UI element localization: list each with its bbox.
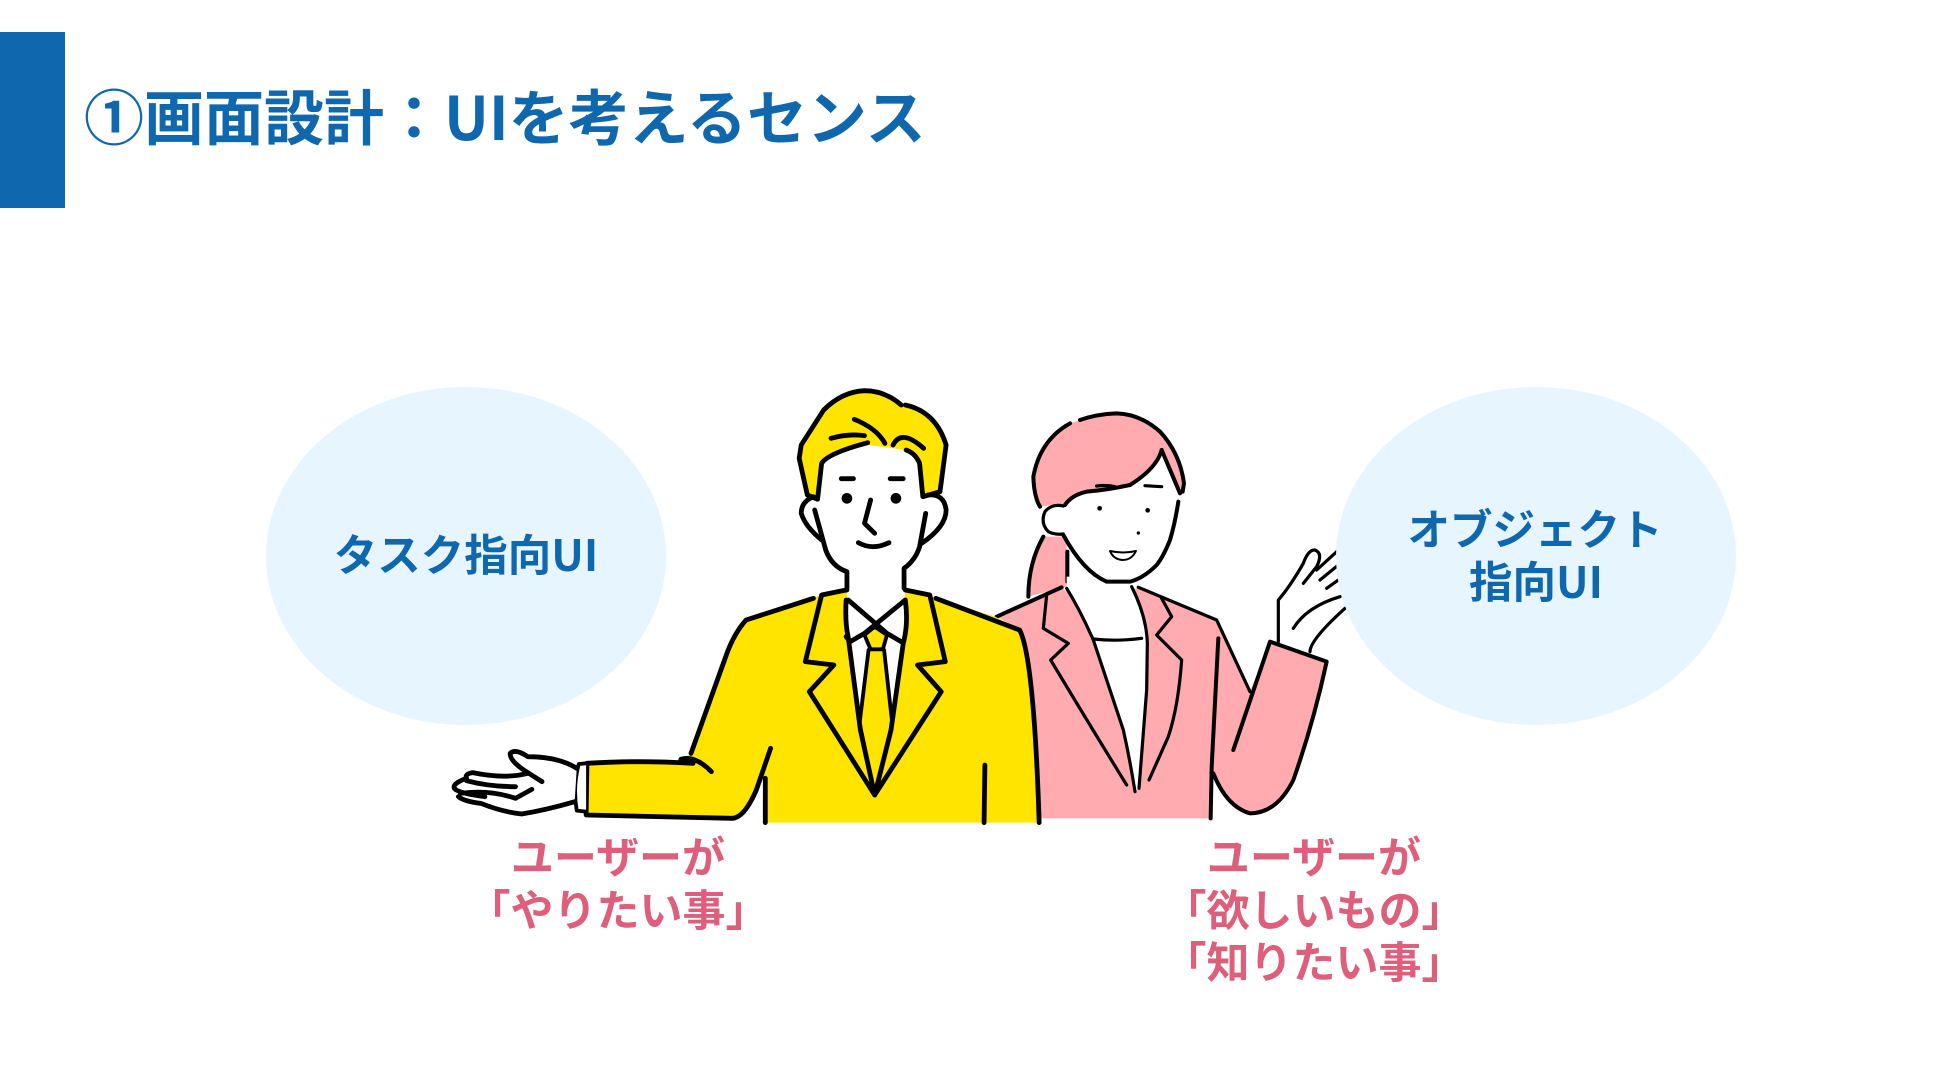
- head: [801, 445, 946, 577]
- shirt and neck: [847, 567, 905, 795]
- title: ①画面設計：UIを考えるセンス: [84, 71, 926, 158]
- bubble: object-oriented UI: [1336, 387, 1736, 725]
- bubble: object-oriented UI: 指向UI: [1469, 548, 1603, 611]
- label: what users want and want to know: 「欲しいもの」: [1164, 877, 1464, 939]
- collar and lapels: [846, 600, 905, 642]
- bubble: object-oriented UI: オブジェクト: [1407, 497, 1663, 558]
- hand: [454, 751, 577, 813]
- face details: [841, 479, 903, 547]
- hair: [799, 391, 946, 498]
- bubble: task-oriented UI: [266, 387, 666, 725]
- label: what users want and want to know: [1164, 824, 1464, 991]
- arm and sleeve: [586, 748, 771, 818]
- label: what users want and want to know: ユーザーが: [1207, 824, 1421, 886]
- label: what users want and want to know: 「知りたい事」: [1164, 929, 1464, 991]
- cuff: [575, 763, 586, 812]
- tie: [860, 627, 892, 795]
- figure: woman: [997, 413, 1360, 818]
- jacket: [586, 590, 1040, 823]
- bubble: task-oriented UI: タスク指向UI: [334, 521, 598, 584]
- figure: man: [454, 391, 1040, 823]
- label: what users want to do: [468, 824, 768, 939]
- label: what users want to do: ユーザーが: [511, 824, 725, 886]
- header accent bar: [0, 32, 65, 208]
- label: what users want to do: 「やりたい事」: [468, 877, 768, 939]
